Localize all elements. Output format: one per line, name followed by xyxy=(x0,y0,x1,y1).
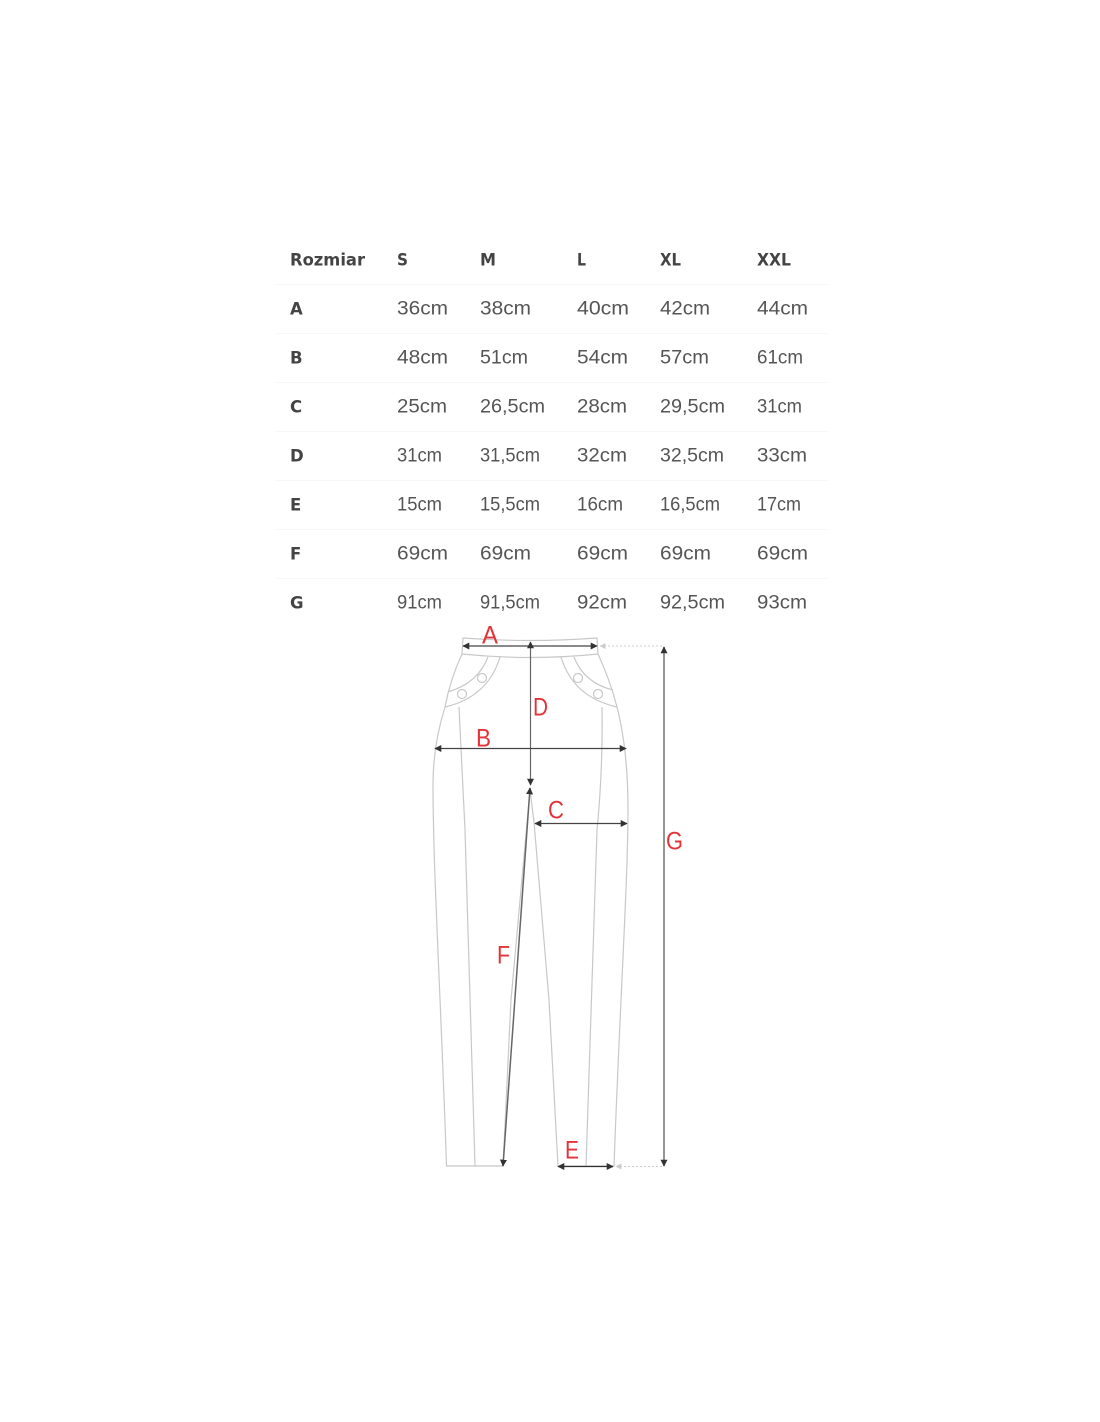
row G: 91,5cm xyxy=(480,592,540,614)
row G: 92,5cm xyxy=(660,592,725,614)
row B: 57cm xyxy=(660,348,709,368)
left pocket xyxy=(445,657,500,707)
row E: 15,5cm xyxy=(480,494,540,516)
table header row: XXL xyxy=(757,250,791,270)
row E: 17cm xyxy=(757,494,801,516)
row A: A xyxy=(290,300,303,318)
trousers outline xyxy=(433,638,628,1166)
row G: 93cm xyxy=(757,592,807,614)
size table xyxy=(290,250,808,614)
row F: 69cm xyxy=(397,544,448,564)
trousers diagram xyxy=(433,622,683,1166)
table header row: Rozmiar xyxy=(290,250,366,270)
row A: 36cm xyxy=(397,298,448,320)
row D: 32,5cm xyxy=(660,446,724,466)
row A: 40cm xyxy=(577,298,629,320)
row C: 26,5cm xyxy=(480,396,545,418)
arrow E xyxy=(558,1166,613,1168)
row C: 29,5cm xyxy=(660,396,725,418)
row A: 42cm xyxy=(660,298,710,320)
measurement letters: A xyxy=(482,622,498,650)
row G: G xyxy=(290,594,304,612)
row D: 32cm xyxy=(577,446,627,466)
row A: 38cm xyxy=(480,298,531,320)
row A xyxy=(290,298,808,320)
row E: 15cm xyxy=(397,494,442,516)
dotted guide lines xyxy=(600,646,662,1166)
row C: C xyxy=(290,398,302,416)
row B xyxy=(290,348,803,368)
measurement letters: D xyxy=(533,694,548,722)
row F: 69cm xyxy=(660,544,711,564)
row D xyxy=(290,446,807,466)
row C: 31cm xyxy=(757,396,802,418)
arrow G xyxy=(663,647,665,1166)
row D: D xyxy=(290,446,304,466)
row F: 69cm xyxy=(480,544,531,564)
arrow F xyxy=(503,788,530,1166)
right pocket xyxy=(561,657,617,707)
row F xyxy=(290,544,808,564)
row G: 91cm xyxy=(397,592,442,614)
row F: F xyxy=(290,544,301,564)
row D: 31,5cm xyxy=(480,446,540,466)
arrow B xyxy=(435,748,626,750)
row B: 54cm xyxy=(577,348,628,368)
measurement letters: F xyxy=(497,942,510,970)
measurement letters: G xyxy=(666,828,683,856)
row B: 61cm xyxy=(757,348,803,368)
measurement letters: B xyxy=(476,724,491,752)
table header row: L xyxy=(577,250,586,270)
table header row: S xyxy=(397,250,408,270)
row E: 16,5cm xyxy=(660,494,720,516)
table header row: M xyxy=(480,250,496,270)
row B: 48cm xyxy=(397,348,448,368)
row G: 92cm xyxy=(577,592,627,614)
row D: 31cm xyxy=(397,446,442,466)
row D: 33cm xyxy=(757,446,807,466)
row C: 28cm xyxy=(577,396,627,418)
arrow C xyxy=(535,822,627,824)
table header row: XL xyxy=(660,250,681,270)
arrow A xyxy=(463,645,597,647)
arrow D xyxy=(530,642,532,785)
row B: 51cm xyxy=(480,348,528,368)
row E: 16cm xyxy=(577,494,623,516)
row C: 25cm xyxy=(397,396,447,418)
row C xyxy=(290,396,802,418)
row E: E xyxy=(290,496,301,514)
row F: 69cm xyxy=(577,544,628,564)
row E xyxy=(290,494,801,516)
measurement letters xyxy=(476,622,683,1164)
measurement letters: E xyxy=(565,1136,579,1164)
row B: B xyxy=(290,348,303,368)
row A: 44cm xyxy=(757,298,808,320)
row G xyxy=(290,592,807,614)
measurement letters: C xyxy=(548,796,564,824)
table header row xyxy=(290,250,791,270)
row F: 69cm xyxy=(757,544,808,564)
